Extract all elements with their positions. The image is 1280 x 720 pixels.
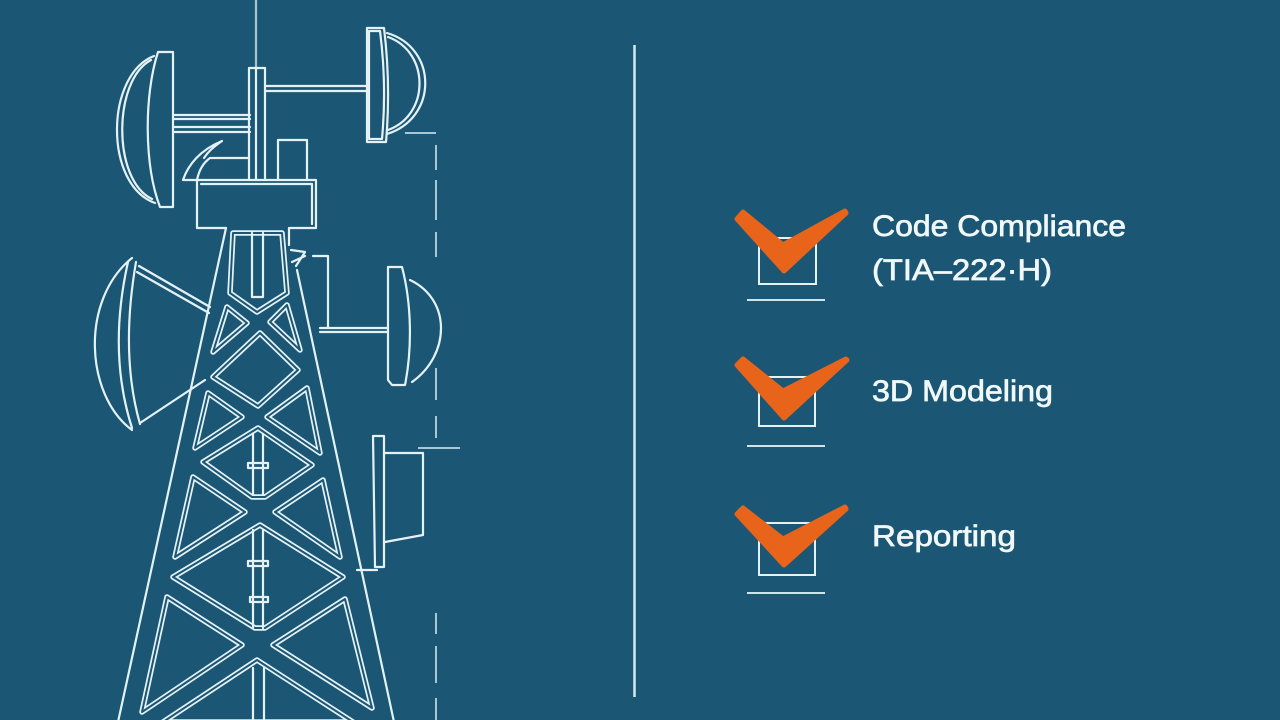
- upper left dish antenna: [117, 52, 250, 207]
- dashed centre line: [405, 133, 460, 720]
- icon: orange check mark: [737, 507, 846, 565]
- tower blueprint illustration: [95, 0, 460, 720]
- small hook bracket: [183, 141, 249, 180]
- tower lattice: [142, 233, 372, 720]
- side cabinet: [357, 436, 423, 570]
- underline: [747, 299, 825, 301]
- label: Code Compliance: [872, 210, 1126, 243]
- right mid dish antenna: [291, 250, 441, 385]
- item: 3D modeling: [737, 359, 1053, 446]
- label: 3D Modeling: [872, 375, 1053, 408]
- label: Reporting: [872, 520, 1016, 553]
- icon: checkbox: [759, 523, 815, 575]
- central vertical strut with clamps: [248, 233, 268, 720]
- vertical divider: [633, 45, 636, 697]
- tower legs: [118, 228, 394, 720]
- label second line: (TIA–222·H): [872, 254, 1052, 287]
- item: reporting: [737, 507, 1016, 593]
- underline: [747, 445, 825, 447]
- top mast antenna: [255, 0, 257, 67]
- equipment box on platform: [278, 140, 307, 180]
- underline: [747, 592, 825, 594]
- central mast: [249, 68, 265, 180]
- upper right dish antenna: [265, 28, 425, 142]
- icon: checkbox: [759, 377, 815, 426]
- icon: orange check mark: [737, 211, 846, 271]
- platform: [197, 180, 316, 245]
- left large dish antenna: [95, 258, 210, 430]
- icon: checkbox: [759, 238, 816, 284]
- icon: orange check mark: [737, 359, 847, 418]
- item: code compliance: [737, 210, 1126, 300]
